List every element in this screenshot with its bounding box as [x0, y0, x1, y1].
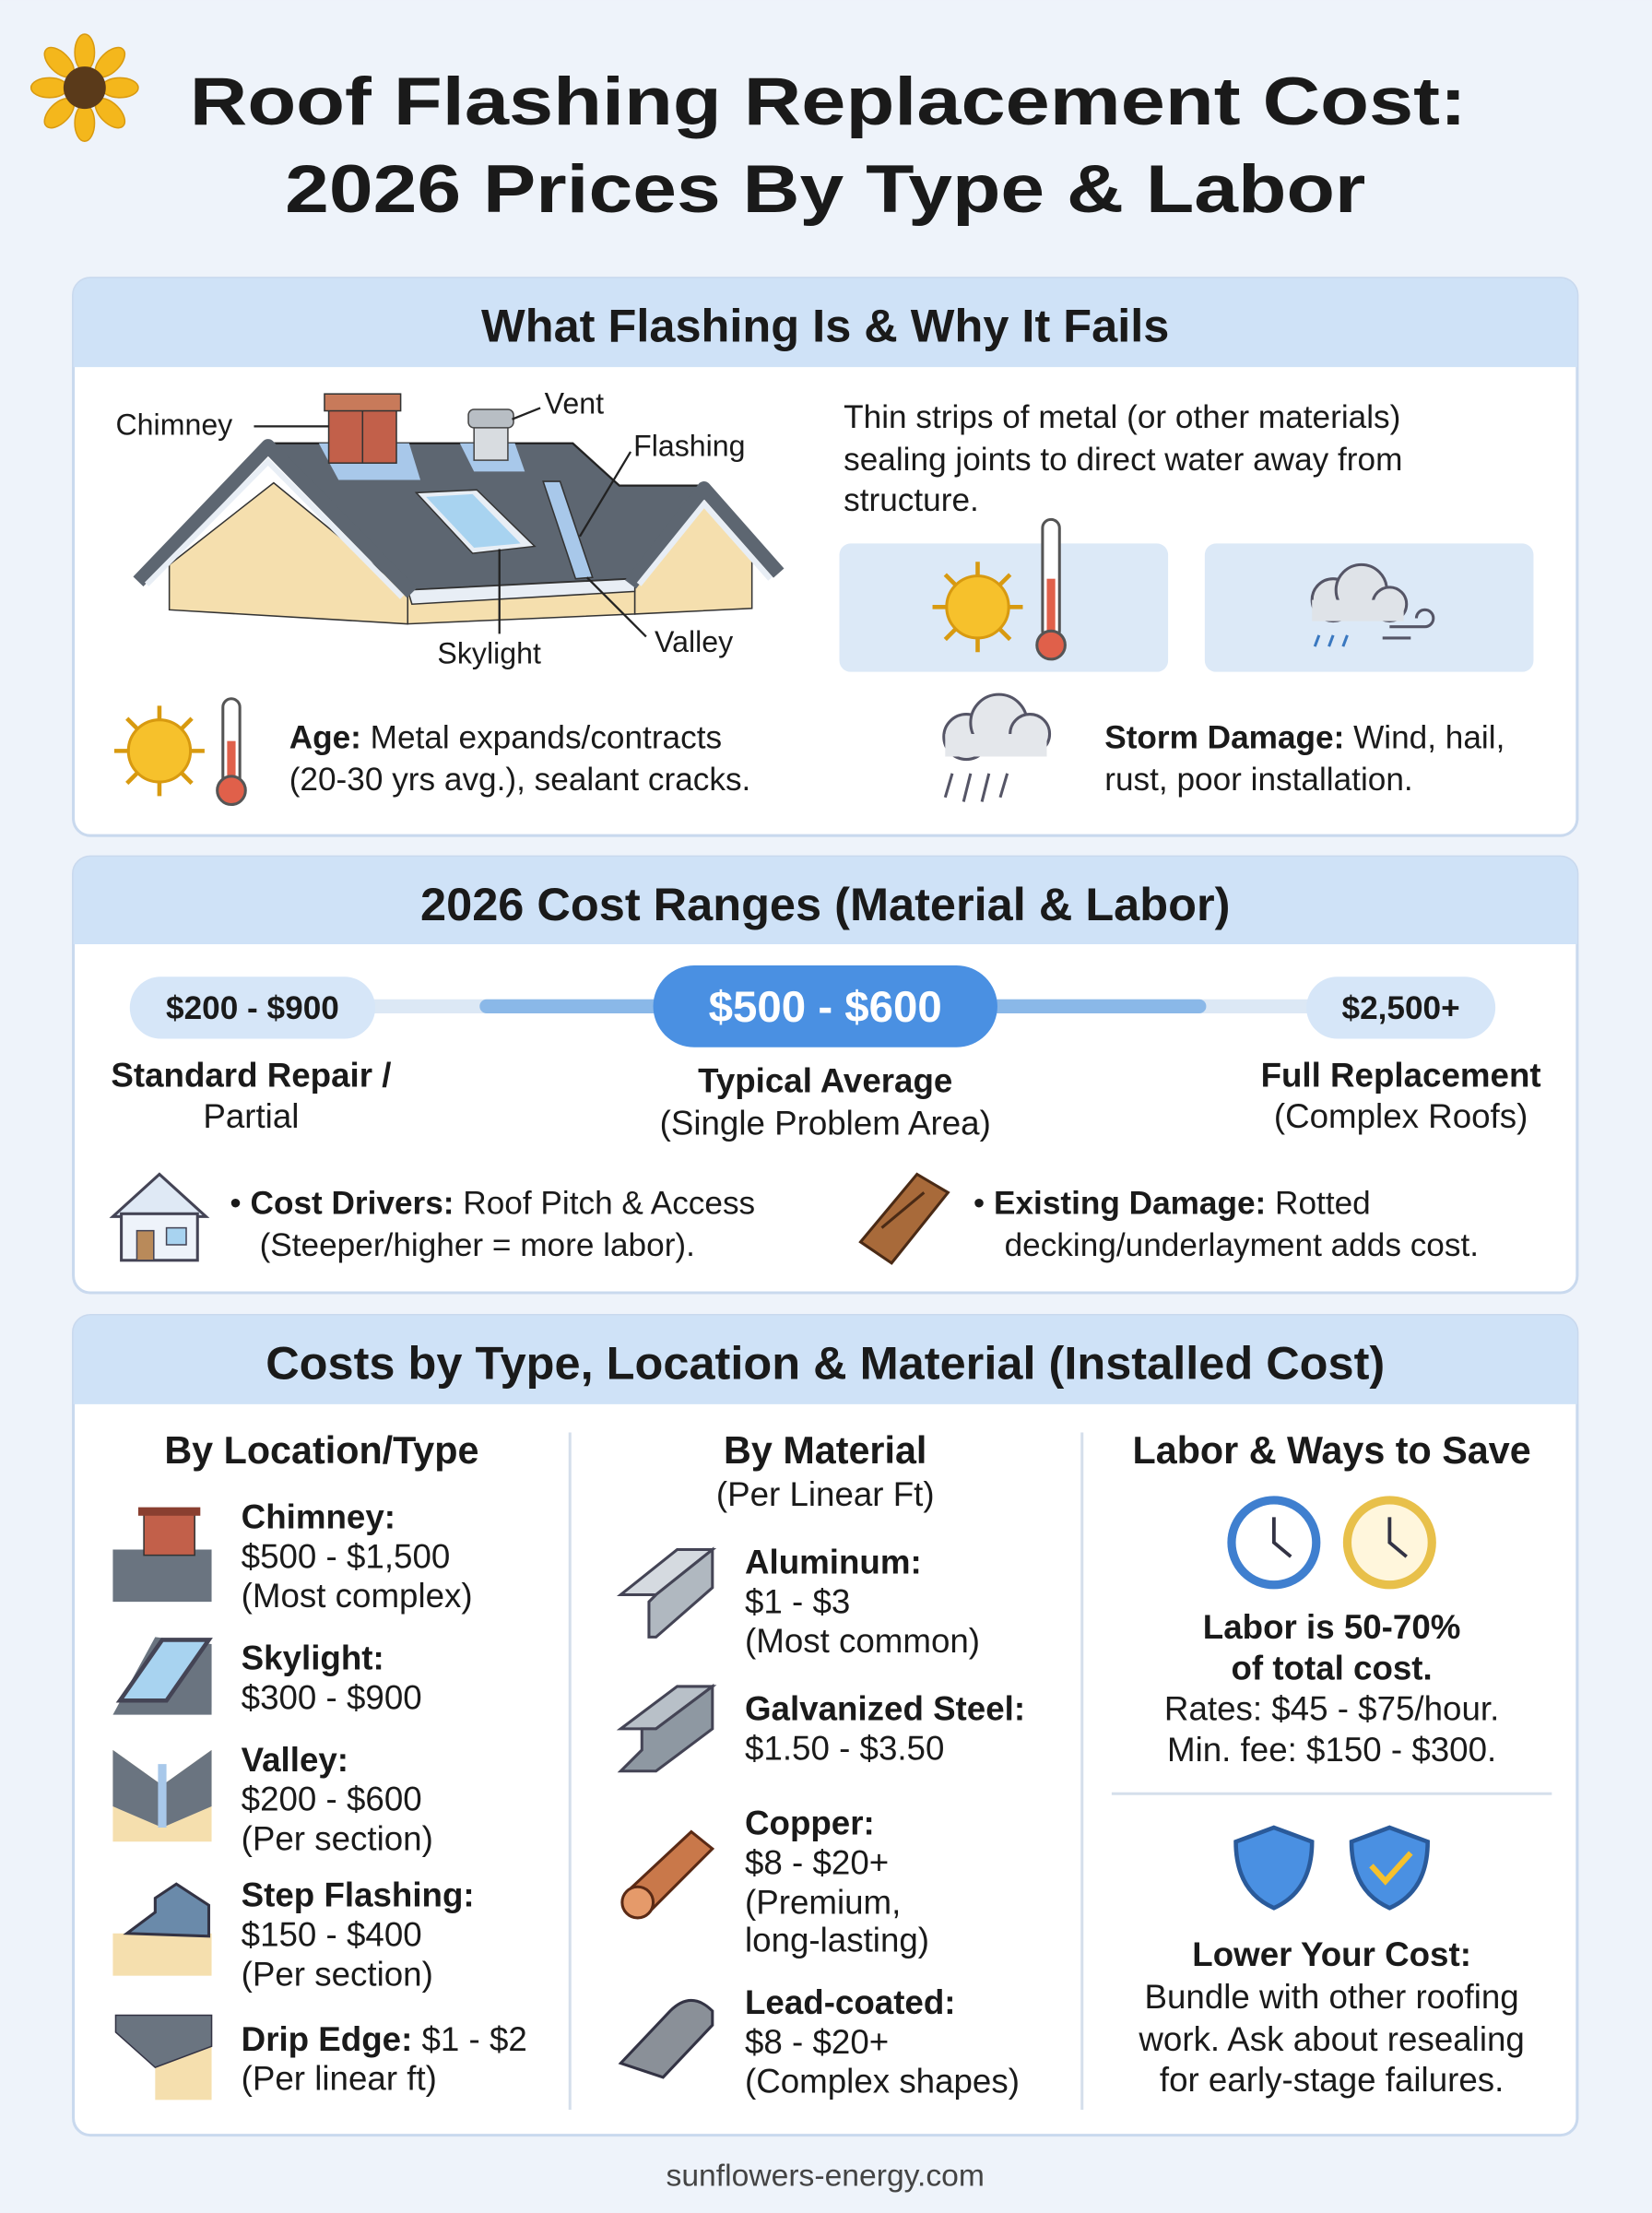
item: valley — [112, 1741, 433, 1857]
item: copper: $8 - $20+ — [745, 1843, 889, 1881]
item: copper — [622, 1805, 929, 1959]
text: cost drivers: • Cost Drivers: Roof Pitch & Access — [230, 1185, 755, 1221]
labels: ranges: Partial — [203, 1097, 299, 1135]
labels: ranges: Full Replacement — [1261, 1057, 1541, 1095]
text: storm damage: rust, poor installation. — [1104, 762, 1413, 798]
item: skylight: Skylight: — [242, 1639, 384, 1677]
column: by material: By Material — [724, 1429, 926, 1472]
item: aluminum: Aluminum: — [745, 1544, 922, 1581]
heading: costs by type: Costs by Type, Location & Material (Installed Cost) — [266, 1336, 1385, 1389]
title — [190, 64, 1467, 227]
item: lead-coated: (Complex shapes) — [745, 2063, 1020, 2101]
heading: cost ranges: 2026 Cost Ranges (Material & Labor) — [420, 878, 1230, 930]
item: galvanized steel — [620, 1686, 1025, 1771]
text: labor: Rates: $45 - $75/hour. — [1164, 1690, 1499, 1728]
item: chimney: $500 - $1,500 — [242, 1537, 450, 1575]
labels: ranges — [111, 1057, 1541, 1142]
text: definition: Thin strips of metal (or other materials) — [844, 399, 1400, 435]
text: existing damage: • Existing Damage: Rotted — [974, 1185, 1371, 1221]
title: Roof Flashing Replacement Cost: — [190, 64, 1467, 139]
item: valley: $200 - $600 — [242, 1781, 422, 1818]
item: drip edge: (Per linear ft) — [242, 2060, 437, 2098]
text: labor: Min. fee: $150 - $300. — [1167, 1731, 1496, 1769]
text: lower your cost — [1138, 1935, 1525, 2099]
label: vent: Vent — [545, 387, 604, 420]
icon: clocks — [1232, 1500, 1432, 1585]
item: drip edge — [115, 2016, 527, 2100]
text: labor — [1164, 1608, 1499, 1769]
item: skylight — [112, 1637, 422, 1716]
text: definition — [844, 399, 1402, 518]
item: step flashing: Step Flashing: — [242, 1876, 475, 1914]
footer: sunflowers-energy.com — [667, 2160, 985, 2194]
item: step flashing — [112, 1876, 475, 1993]
labels: ranges: (Single Problem Area) — [660, 1105, 991, 1142]
chart: range slider: $2,500+ — [1342, 990, 1460, 1026]
text: lower your cost: Lower Your Cost: — [1192, 1935, 1471, 1973]
item: lead-coated: Lead-coated: — [745, 1983, 956, 2021]
labels: ranges: Standard Repair / — [111, 1057, 391, 1095]
title: 2026 Prices By Type & Labor — [285, 151, 1365, 227]
item: galvanized steel: Galvanized Steel: — [745, 1690, 1025, 1728]
column: by material — [620, 1429, 1025, 2101]
chart: range slider: $500 - $600 — [709, 983, 942, 1032]
item: aluminum: $1 - $3 — [745, 1582, 850, 1620]
labels: ranges: (Complex Roofs) — [1274, 1097, 1528, 1135]
chart: range slider — [130, 965, 1495, 1047]
text: definition: structure. — [844, 482, 979, 518]
panel: costs by type — [74, 1315, 1577, 2136]
column: by location: By Location/Type — [164, 1429, 478, 1472]
text: age — [114, 699, 750, 805]
text: lower your cost: Bundle with other roofing — [1145, 1978, 1519, 2016]
item: chimney: (Most complex) — [242, 1577, 473, 1615]
item: valley: Valley: — [242, 1741, 348, 1779]
item: step flashing: $150 - $400 — [242, 1916, 422, 1954]
illustration: roof diagram — [115, 387, 779, 669]
text: existing damage — [860, 1174, 1479, 1263]
labels: ranges: Typical Average — [698, 1062, 952, 1100]
item: drip edge: Drip Edge: $1 - $2 — [242, 2020, 527, 2058]
text: labor: of total cost. — [1231, 1649, 1433, 1686]
item: galvanized steel: $1.50 - $3.50 — [745, 1730, 944, 1768]
label: flashing: Flashing — [633, 430, 746, 463]
item: lead-coated — [620, 1983, 1020, 2101]
icon: sunflower logo — [31, 34, 138, 141]
chart: range slider: $200 - $900 — [166, 990, 339, 1026]
icon box: storm — [1205, 543, 1533, 672]
column: by material: (Per Linear Ft) — [716, 1475, 935, 1513]
panel: what flashing is — [74, 278, 1577, 835]
text: age: Age: Metal expands/contracts — [289, 719, 722, 755]
column: by location — [112, 1429, 527, 2100]
text: age: (20-30 yrs avg.), sealant cracks. — [289, 762, 750, 798]
icon box: heat — [840, 519, 1168, 672]
column: labor & ways to save: Labor & Ways to Save — [1133, 1429, 1531, 1472]
heading: what flashing is: What Flashing Is & Why It Fails — [481, 300, 1169, 352]
item: copper: Copper: — [745, 1805, 875, 1842]
label: skylight: Skylight — [437, 636, 541, 669]
item: aluminum — [620, 1544, 980, 1660]
text: existing damage: decking/underlayment adds cost. — [1005, 1227, 1479, 1263]
panel: cost ranges — [74, 857, 1577, 1293]
text: cost drivers — [112, 1174, 755, 1263]
item: aluminum: (Most common) — [745, 1622, 980, 1660]
text: lower your cost: work. Ask about resealing — [1138, 2020, 1525, 2058]
text: storm damage — [944, 694, 1504, 801]
item: copper: long-lasting) — [745, 1922, 929, 1959]
item: valley: (Per section) — [242, 1819, 433, 1857]
item: copper: (Premium, — [745, 1883, 901, 1921]
item: lead-coated: $8 - $20+ — [745, 2023, 889, 2061]
item: chimney: Chimney: — [242, 1498, 395, 1536]
item: chimney — [112, 1498, 473, 1615]
item: skylight: $300 - $900 — [242, 1678, 422, 1716]
text: lower your cost: for early-stage failures. — [1160, 2061, 1504, 2099]
text: definition: sealing joints to direct water away from — [844, 442, 1402, 478]
label: chimney: Chimney — [115, 408, 232, 442]
item: step flashing: (Per section) — [242, 1955, 433, 1993]
column: labor & ways to save — [1112, 1429, 1552, 2099]
icon: shields — [1236, 1828, 1428, 1908]
text: storm damage: Storm Damage: Wind, hail, — [1104, 719, 1504, 755]
text: labor: Labor is 50-70% — [1203, 1608, 1460, 1646]
label: valley: Valley — [655, 625, 733, 658]
text: cost drivers: (Steeper/higher = more labor). — [260, 1227, 695, 1263]
